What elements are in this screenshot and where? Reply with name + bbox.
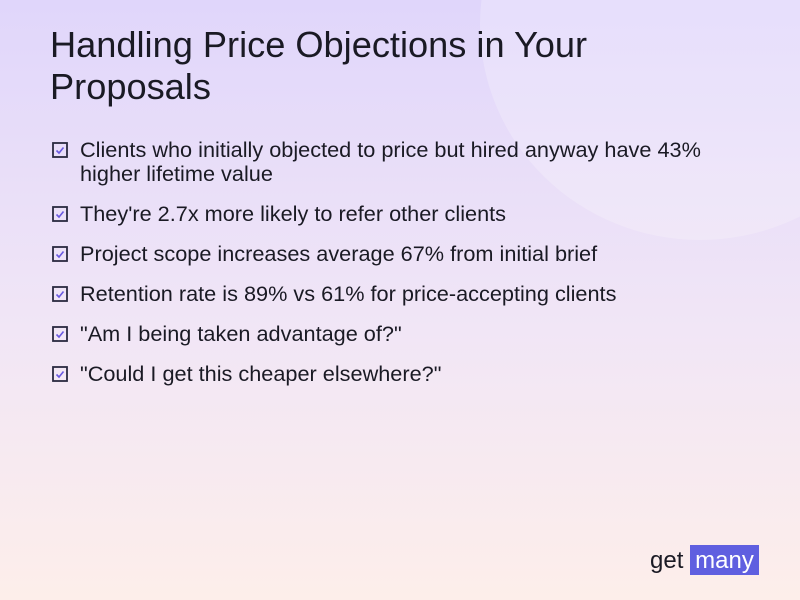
item 6: "Could I get this cheaper elsewhere?" (80, 361, 441, 386)
logo (650, 545, 759, 575)
item 1: Clients who initially objected to price but hired anyway have 43% higher lifetime value (80, 137, 701, 186)
logo: many (695, 547, 754, 574)
item 2: They're 2.7x more likely to refer other clients (80, 201, 506, 226)
item 5: "Am I being taken advantage of?" (80, 321, 402, 346)
item 4: Retention rate is 89% vs 61% for price-accepting clients (80, 281, 616, 306)
logo: get (650, 547, 683, 574)
item 3: Project scope increases average 67% from initial brief (80, 241, 597, 266)
title: Handling Price Objections in Your Proposals (50, 24, 587, 107)
